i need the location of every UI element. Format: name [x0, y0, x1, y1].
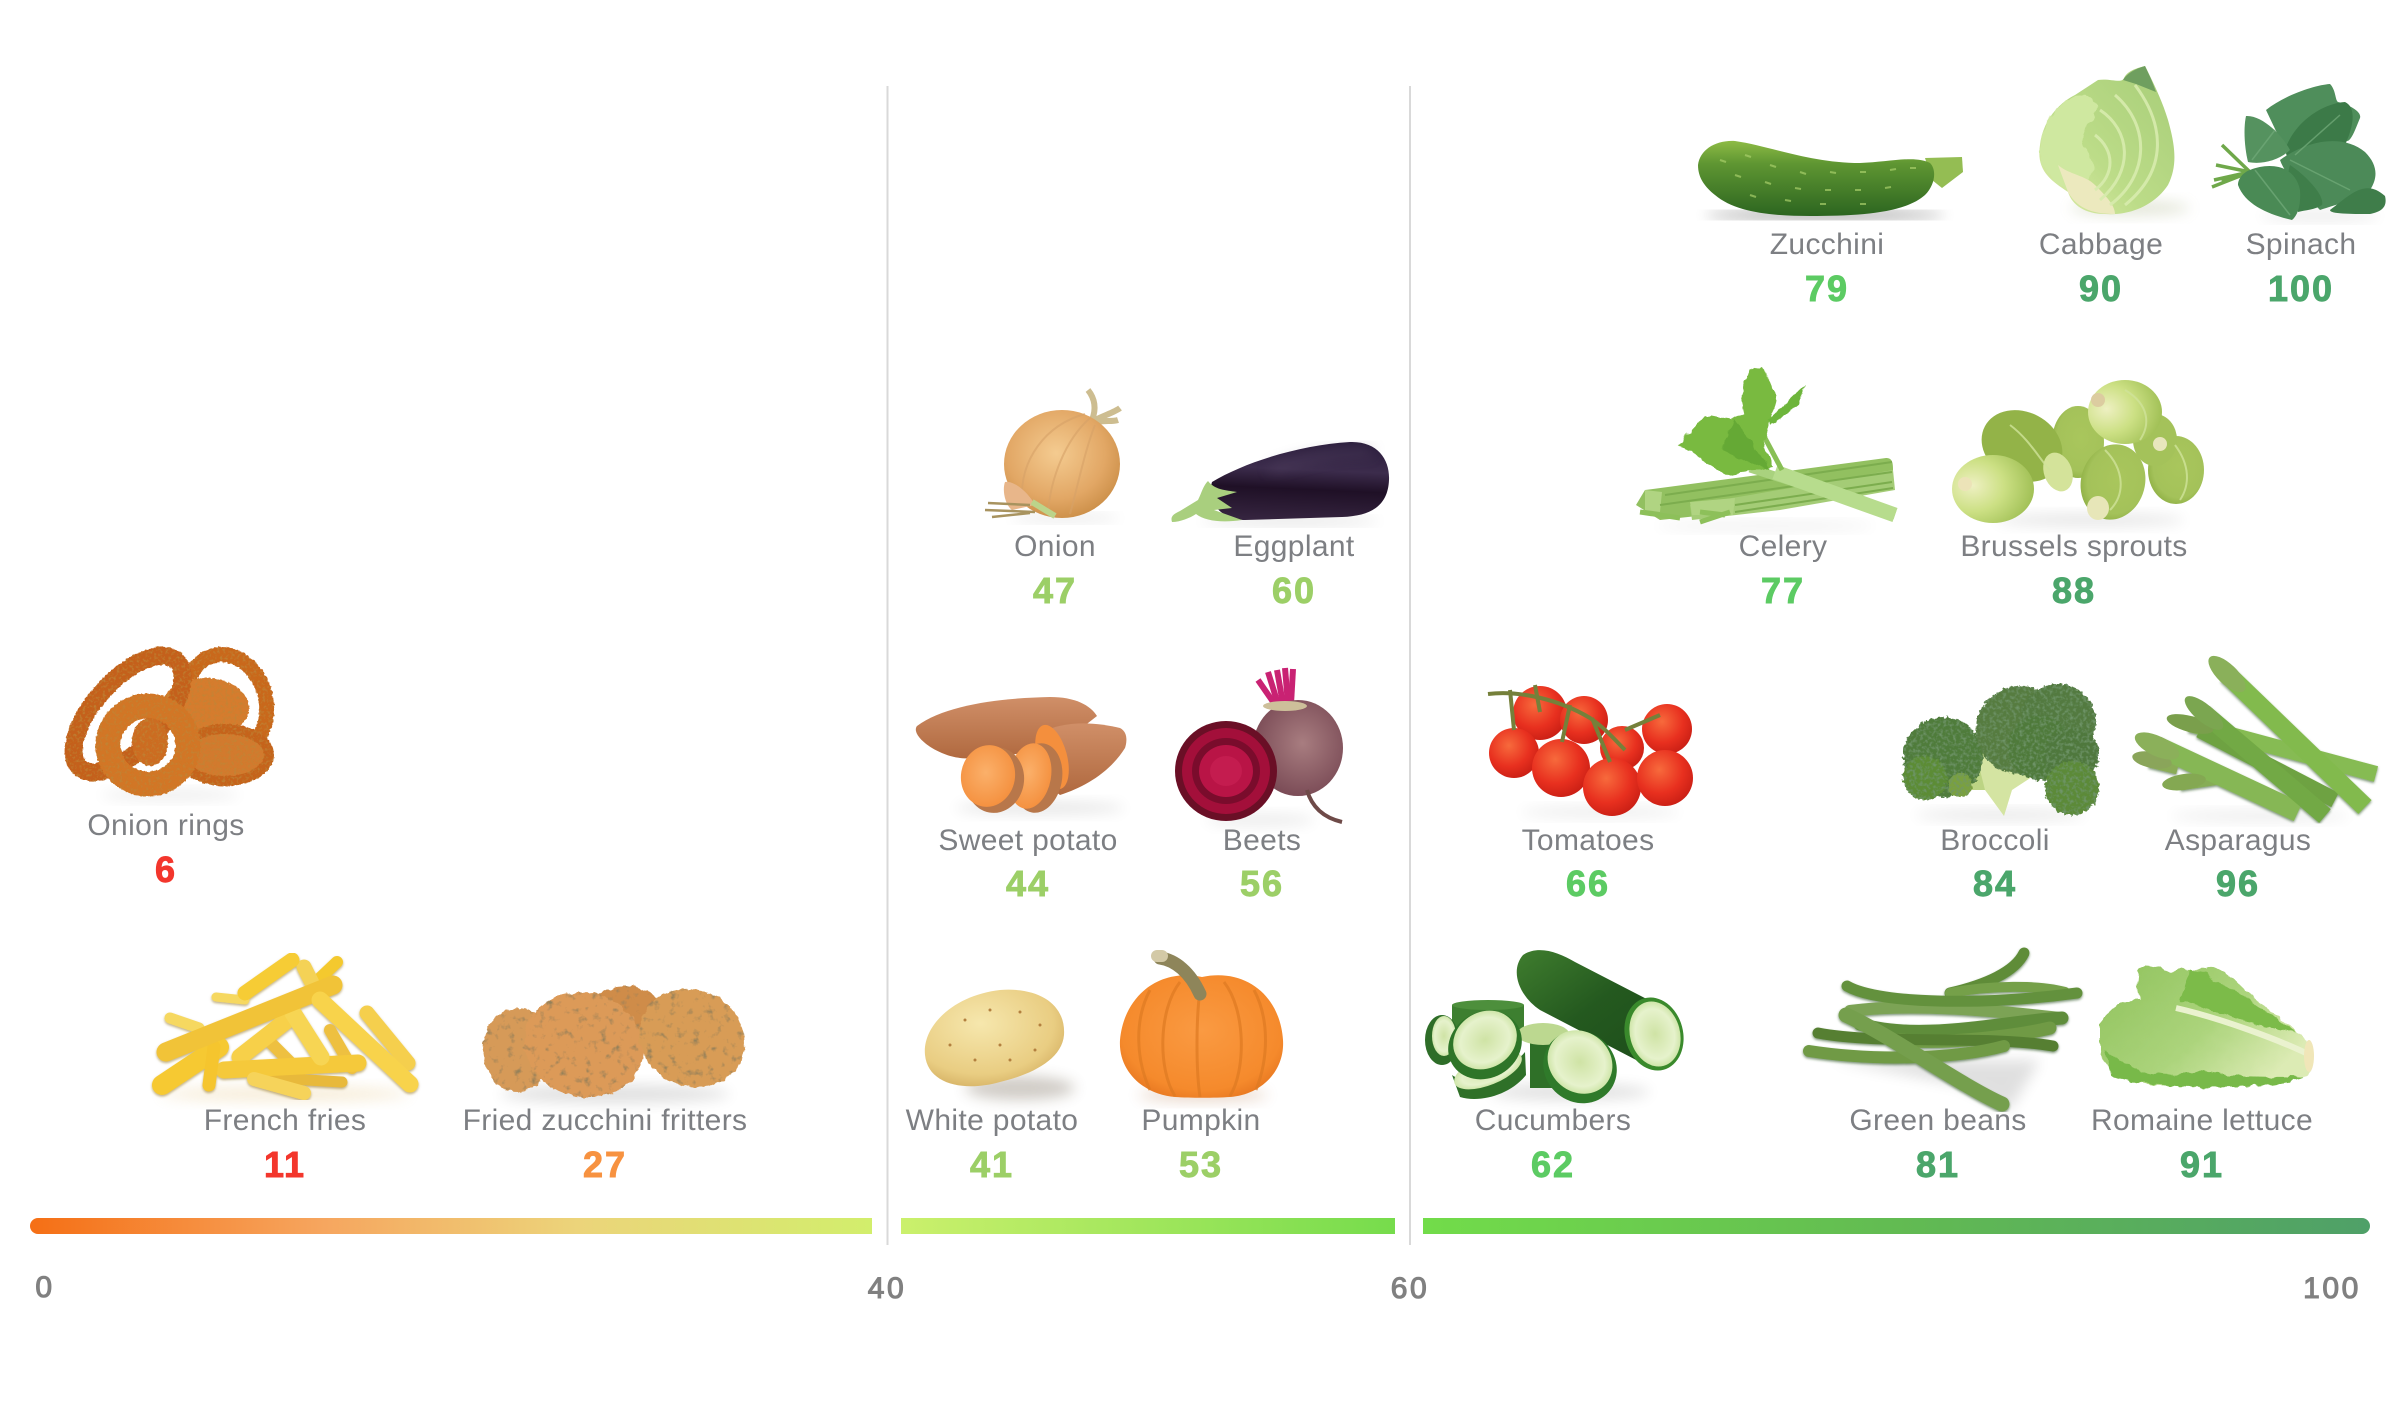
- item: pumpkin: [1120, 956, 1283, 1185]
- item: white potato: [906, 990, 1078, 1185]
- item: zucchini: [1698, 141, 1963, 309]
- label: Cabbage: [2039, 228, 2163, 261]
- value: 84: [1973, 863, 2017, 904]
- value: 44: [1006, 863, 1050, 904]
- icon: brussels sprouts: [1952, 380, 2204, 527]
- icon: beets: [1175, 668, 1343, 826]
- icon: romaine lettuce: [2100, 966, 2314, 1087]
- scale bar: low range 0 to 40: [30, 1218, 872, 1234]
- item: romaine lettuce: [2091, 966, 2314, 1185]
- icon: sweet potato: [916, 697, 1126, 818]
- value: 81: [1916, 1144, 1960, 1185]
- item: sweet potato: [916, 697, 1126, 904]
- label: Celery: [1739, 530, 1827, 563]
- value: 6: [155, 849, 177, 890]
- item: cabbage: [2039, 66, 2190, 309]
- icon: onion: [985, 390, 1120, 521]
- label: Sweet potato: [938, 824, 1118, 857]
- icon: cabbage: [2039, 66, 2190, 215]
- label: White potato: [906, 1104, 1078, 1137]
- value: 96: [2216, 863, 2260, 904]
- icon: spinach: [2212, 84, 2386, 220]
- item: spinach: [2212, 84, 2386, 309]
- value: 47: [1033, 570, 1077, 611]
- label: Onion rings: [87, 809, 245, 842]
- icon: pumpkin: [1120, 956, 1283, 1101]
- icon: french fries: [160, 960, 410, 1101]
- tick label 60: 60: [1391, 1272, 1429, 1305]
- icon: white potato: [925, 990, 1075, 1100]
- scale bar: high range 60 to 100: [1423, 1218, 2370, 1234]
- tick label 0: 0: [35, 1271, 55, 1304]
- item: celery: [1636, 366, 1895, 611]
- label: French fries: [204, 1104, 366, 1137]
- item: eggplant: [1171, 442, 1389, 611]
- value: 53: [1179, 1144, 1223, 1185]
- value: 88: [2052, 570, 2096, 611]
- value: 56: [1240, 863, 1284, 904]
- label: Green beans: [1849, 1104, 2027, 1137]
- label: Spinach: [2246, 228, 2356, 261]
- item: green beans: [1809, 953, 2077, 1185]
- scale bar: mid range 40 to 60: [901, 1218, 1395, 1234]
- item: onion: [985, 390, 1120, 611]
- score scale: [30, 1218, 2370, 1305]
- label: Romaine lettuce: [2091, 1104, 2313, 1137]
- icon: celery: [1636, 366, 1895, 530]
- value: 62: [1531, 1144, 1575, 1185]
- tick label 40: 40: [868, 1272, 906, 1305]
- divider at 60: [1409, 86, 1411, 1245]
- icon: tomatoes: [1488, 685, 1693, 817]
- icon: eggplant: [1171, 442, 1389, 524]
- item: fried zucchini fritters: [463, 972, 761, 1185]
- item: cucumbers: [1425, 950, 1692, 1185]
- value: 60: [1272, 570, 1316, 611]
- item: french fries: [160, 960, 410, 1185]
- label: Tomatoes: [1522, 824, 1654, 857]
- item: onion rings: [55, 638, 277, 890]
- icon: asparagus: [2131, 650, 2376, 821]
- value: 100: [2268, 268, 2334, 309]
- label: Onion: [1014, 530, 1096, 563]
- value: 41: [970, 1144, 1014, 1185]
- label: Zucchini: [1770, 228, 1884, 261]
- label: Broccoli: [1940, 824, 2050, 857]
- value: 66: [1566, 863, 1610, 904]
- icon: broccoli: [1903, 684, 2099, 820]
- value: 90: [2079, 268, 2123, 309]
- label: Pumpkin: [1141, 1104, 1261, 1137]
- label: Fried zucchini fritters: [463, 1104, 747, 1137]
- label: Eggplant: [1233, 530, 1355, 563]
- icon: cucumbers: [1425, 950, 1692, 1118]
- item: asparagus: [2131, 650, 2376, 904]
- item: beets: [1175, 668, 1343, 904]
- tick label 100: 100: [2303, 1272, 2361, 1305]
- label: Beets: [1223, 824, 1301, 857]
- label: Brussels sprouts: [1960, 530, 2188, 563]
- value: 77: [1761, 570, 1805, 611]
- label: Asparagus: [2165, 824, 2311, 857]
- icon: fritters: [483, 972, 761, 1111]
- value: 91: [2180, 1144, 2224, 1185]
- icon: onion rings: [55, 638, 277, 800]
- divider at 40: [886, 86, 888, 1245]
- item: broccoli: [1903, 684, 2099, 904]
- item: tomatoes: [1488, 685, 1693, 904]
- label: Cucumbers: [1475, 1104, 1631, 1137]
- icon: green beans: [1809, 953, 2077, 1110]
- item: brussels sprouts: [1952, 380, 2204, 611]
- icon: zucchini: [1698, 141, 1963, 218]
- value: 27: [583, 1144, 627, 1185]
- value: 79: [1805, 268, 1849, 309]
- value: 11: [264, 1144, 306, 1185]
